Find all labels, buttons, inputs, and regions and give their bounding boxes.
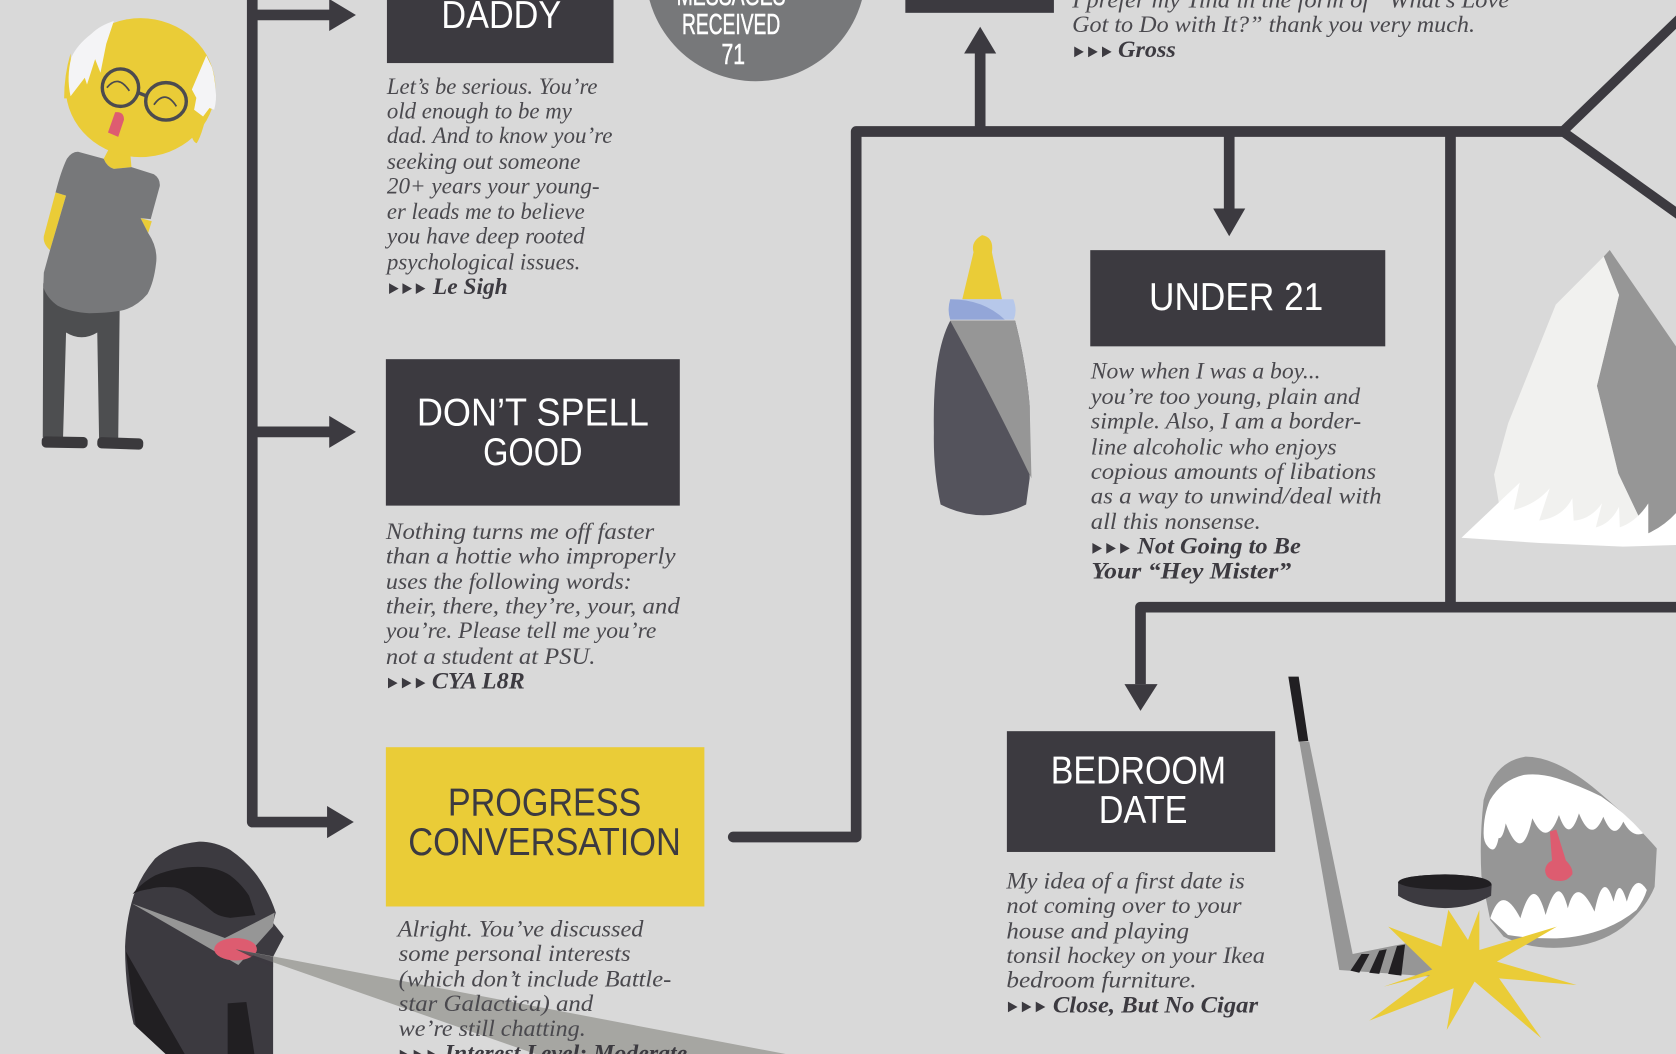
text: progress conversation verdict: we’re still chatting. [399, 1016, 586, 1042]
box: don't spell good: DON’T SPELL [417, 391, 649, 434]
text: don't spell good verdict: than a hottie who improperly [386, 543, 676, 569]
text: progress conversation verdict: Alright. You’ve discussed [396, 916, 644, 942]
text: bedroom date verdict: My idea of a first date is [1005, 868, 1245, 894]
text: under 21 verdict [1089, 358, 1382, 584]
circle: messages received [646, 0, 866, 81]
box: bedroom date: BEDROOM [1051, 750, 1226, 793]
text: under 21 verdict: copious amounts of libations [1091, 459, 1376, 485]
text: daddy verdict: psychological issues. [385, 249, 580, 275]
icon: old man [42, 18, 216, 450]
text: under 21 verdict: Your “Hey Mister” [1091, 558, 1291, 584]
text: under 21 verdict: you’re too young, plain and [1089, 384, 1360, 410]
text: don't spell good verdict: their, there, they’re, your, and [386, 594, 680, 620]
box: progress conversation [386, 747, 704, 906]
icon: baby bottle [934, 235, 1031, 515]
text: don't spell good verdict: CYA L8R [432, 668, 525, 694]
text: under 21 verdict: Not Going to Be [1136, 534, 1301, 560]
icon: hockey stick and puck [1288, 677, 1492, 977]
icon: shark fin [1461, 250, 1676, 547]
text: don't spell good verdict: uses the following words: [386, 569, 632, 595]
box: progress conversation: PROGRESS [448, 782, 641, 825]
text: bedroom date verdict [1005, 868, 1265, 1018]
text: bedroom date verdict: tonsil hockey on your Ikea [1006, 943, 1265, 969]
box: top centre [905, 0, 1054, 13]
text: daddy verdict: seeking out someone [387, 149, 580, 175]
icon: hooded figure with beam [125, 842, 786, 1054]
text: progress conversation verdict: (which don’t include Battle- [399, 967, 671, 993]
text: progress conversation verdict [396, 916, 687, 1054]
text: progress conversation verdict: star Galactica) and [399, 991, 593, 1017]
text: bedroom date verdict: Close, But No Cigar [1053, 992, 1259, 1018]
text: under 21 verdict: Now when I was a boy... [1090, 358, 1321, 384]
text: under 21 verdict: simple. Also, I am a border- [1091, 409, 1361, 435]
text: don't spell good verdict: you’re. Please tell me you’re [384, 618, 656, 644]
flow line: main connector and branches [733, 15, 1676, 837]
text: don't spell good verdict [384, 519, 680, 694]
text: gross verdict: Got to Do with It?” thank you very much. [1072, 12, 1475, 38]
text: daddy verdict [385, 74, 612, 300]
box: progress conversation: CONVERSATION [408, 821, 681, 864]
icon: yellow impact burst [1369, 910, 1577, 1038]
text: don't spell good verdict: not a student at PSU. [386, 644, 595, 670]
text: daddy verdict: dad. And to know you’re [387, 123, 612, 149]
box: under 21 [1090, 250, 1385, 346]
text: under 21 verdict: all this nonsense. [1091, 509, 1261, 535]
text: daddy verdict: Let’s be serious. You’re [386, 74, 598, 100]
text: gross verdict [1071, 0, 1509, 63]
text: bedroom date verdict: not coming over to your [1006, 893, 1242, 919]
box: don't spell good: GOOD [483, 431, 583, 474]
circle: messages received: 71 [721, 39, 745, 71]
text: bedroom date verdict: house and playing [1006, 919, 1189, 945]
box: don't spell good [386, 359, 680, 506]
text: daddy verdict: 20+ years your young- [387, 173, 600, 199]
flow line: left trunk with arrows [252, 0, 356, 838]
text: bedroom date verdict: bedroom furniture. [1006, 968, 1197, 994]
box: daddy [387, 0, 614, 63]
text: don't spell good verdict: Nothing turns me off faster [385, 519, 655, 545]
box: under 21: UNDER 21 [1149, 276, 1323, 319]
text: daddy verdict: er leads me to believe [387, 199, 585, 225]
text: daddy verdict: old enough to be my [387, 99, 572, 125]
text: progress conversation verdict: some personal interests [399, 941, 631, 967]
icon: mouth with teeth [1481, 757, 1657, 948]
text: under 21 verdict: as a way to unwind/deal with [1091, 483, 1382, 509]
text: daddy verdict: Le Sigh [432, 274, 508, 300]
text: daddy verdict: you have deep rooted [385, 224, 585, 250]
circle: messages received: RECEIVED [682, 9, 780, 41]
text: gross verdict: Gross [1118, 37, 1176, 63]
text: under 21 verdict: line alcoholic who enjoys [1091, 434, 1337, 460]
box: bedroom date: DATE [1099, 789, 1188, 832]
box: bedroom date [1007, 731, 1275, 852]
